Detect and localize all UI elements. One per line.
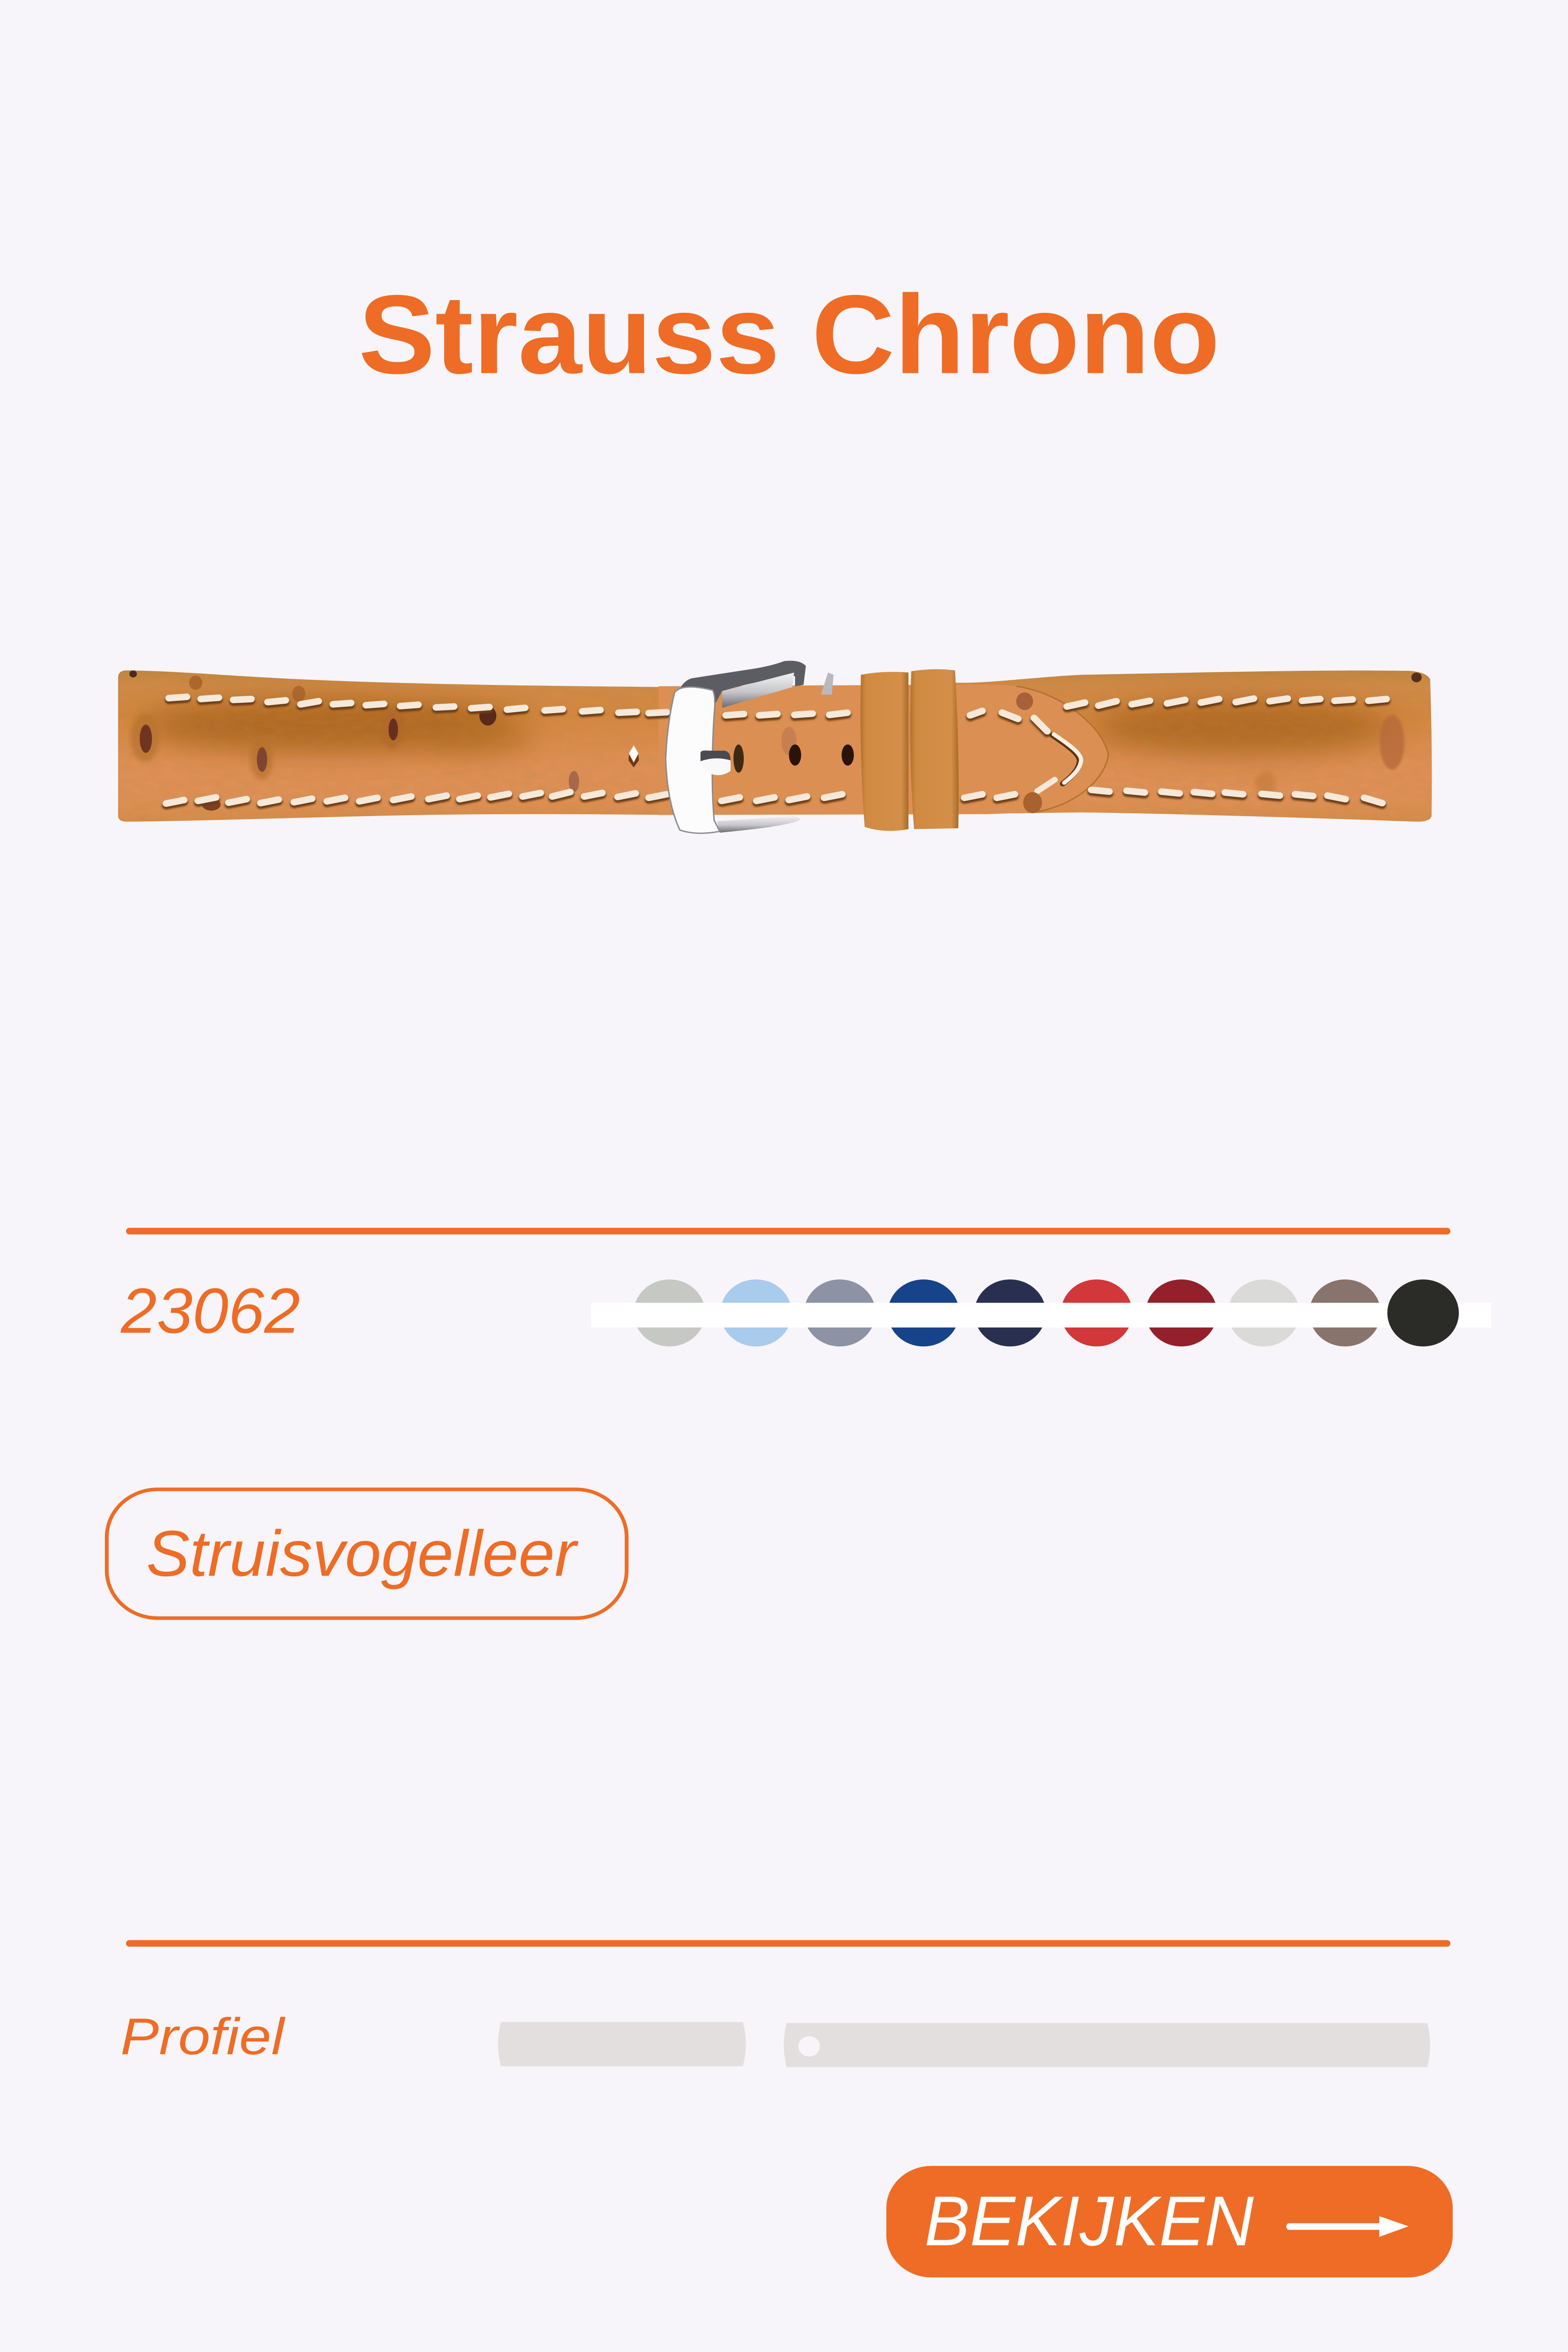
product image: leather watch strap xyxy=(118,661,1435,833)
keeper loops xyxy=(860,669,959,831)
profile shape: long piece with hole xyxy=(784,2023,1430,2067)
colour swatches xyxy=(591,1279,1491,1346)
strap: center tongue xyxy=(659,684,1108,815)
material pill: Struisvogelleer xyxy=(107,1489,627,1618)
divider line top xyxy=(126,1228,1450,1234)
buckle xyxy=(666,661,834,833)
material pill: Struisvogelleer: Struisvogelleer xyxy=(146,1518,579,1590)
strap: left piece xyxy=(118,668,682,825)
button: BEKIJKEN xyxy=(886,2166,1453,2278)
icon: arrow xyxy=(1286,2216,1409,2237)
button: BEKIJKEN: BEKIJKEN xyxy=(924,2182,1254,2260)
article number: 23062 xyxy=(120,1275,300,1346)
stitching xyxy=(166,697,1386,806)
divider line bottom xyxy=(126,1940,1450,1947)
strap: right long piece xyxy=(955,668,1435,825)
profile shape: short piece xyxy=(498,2022,746,2066)
quill marks and holes on tongue xyxy=(629,692,1042,813)
title: Strauss Chrono xyxy=(358,272,1220,397)
profile label: Profiel xyxy=(120,2008,286,2066)
